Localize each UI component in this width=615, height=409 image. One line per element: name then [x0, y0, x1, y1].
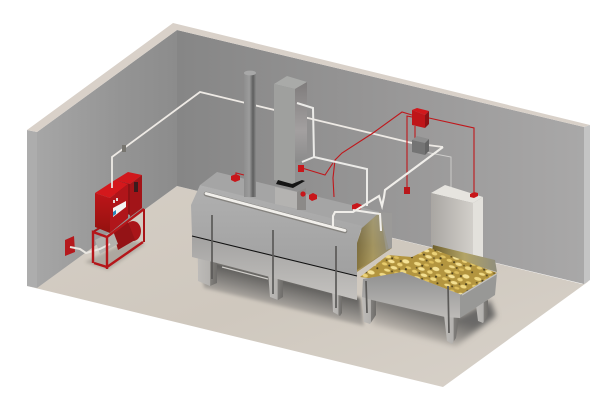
exhaust duct	[274, 76, 307, 210]
black seam	[192, 236, 357, 276]
rear red cabinet	[115, 172, 142, 217]
tray back panel	[432, 245, 497, 272]
chimney	[244, 71, 256, 197]
red wall detector	[404, 187, 410, 194]
inlet pipe	[70, 244, 110, 253]
white pipework behind duct	[297, 103, 367, 206]
signal cable to white cabinet	[425, 152, 451, 187]
red sensors	[231, 165, 362, 211]
floor shadows	[85, 240, 496, 346]
front red cabinet	[95, 180, 128, 233]
fryer roof	[200, 172, 392, 228]
tray legs	[362, 297, 488, 344]
fryer legs	[198, 255, 342, 316]
red detection line on roof	[236, 173, 244, 177]
potato chips	[360, 248, 497, 295]
pump motor	[113, 221, 141, 250]
right wall end face	[584, 125, 590, 284]
roof spray pipe	[206, 194, 345, 231]
fryer upper body	[191, 185, 362, 276]
pipe into cabinet	[111, 178, 113, 188]
left wall	[37, 30, 177, 288]
gauges	[113, 198, 118, 203]
red device on cabinet	[470, 192, 478, 198]
black duct collar	[276, 180, 305, 188]
fryer vertical rods	[212, 215, 336, 308]
silver piping	[95, 231, 118, 254]
front white pipework	[333, 147, 443, 231]
white electrical cabinet	[431, 185, 483, 258]
fryer	[191, 172, 392, 316]
cabinet label	[113, 201, 126, 217]
fryer outlet hood	[357, 212, 392, 272]
pipe coupling	[122, 145, 126, 152]
tray front face	[362, 272, 462, 318]
wall piping: white service pipe	[112, 92, 443, 190]
tray side face	[460, 273, 497, 318]
tray rods	[366, 281, 449, 333]
front frame	[93, 209, 144, 269]
wall-mounted red wiring	[302, 112, 474, 197]
suppression unit	[65, 172, 144, 269]
grey junction box	[412, 136, 429, 155]
infeed tray	[360, 245, 498, 344]
wall top cap	[27, 23, 590, 132]
floor	[27, 186, 589, 387]
tray rim	[462, 273, 498, 295]
fryer rear rails	[222, 267, 268, 279]
left wall end face	[27, 130, 37, 288]
rear frame	[93, 209, 144, 242]
back wall	[177, 30, 584, 284]
fryer lower body	[192, 236, 357, 300]
wall plate	[65, 236, 75, 256]
red control box	[412, 108, 429, 128]
